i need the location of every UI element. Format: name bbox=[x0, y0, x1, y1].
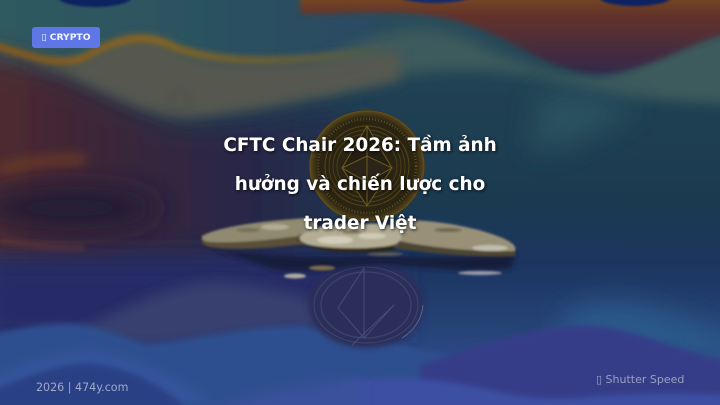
top right dark blue ellipse bbox=[599, 0, 671, 6]
right flat coin bbox=[390, 220, 515, 257]
category badge: ▯ CRYPTO bbox=[41, 32, 91, 43]
wave: lower left light band bbox=[0, 352, 215, 405]
wave: lower left indigo field bbox=[0, 258, 400, 343]
wave: right blue glow bbox=[560, 303, 720, 360]
wave: upper left orange ridge bbox=[0, 38, 380, 61]
faint ring mark bbox=[170, 92, 190, 112]
reflected coin glints bbox=[284, 252, 502, 278]
wave: right teal glow bbox=[530, 94, 640, 150]
centre flat coin bbox=[298, 224, 402, 252]
category badge bbox=[32, 27, 100, 48]
wave: left dark pool bbox=[0, 186, 160, 230]
wave: bottom left dark hump bbox=[0, 363, 200, 405]
upright ethereum coin bbox=[309, 110, 425, 222]
left flat coin bbox=[202, 218, 330, 249]
wave: left maroon to purple field bbox=[0, 50, 350, 262]
wave: bottom middle strip bbox=[180, 380, 360, 405]
wave: left orange streak bbox=[0, 160, 85, 170]
title: trader Việt bbox=[304, 213, 416, 234]
wave: lower left blue band bbox=[0, 324, 720, 405]
wave: upper left beige band bbox=[0, 38, 400, 118]
title: CFTC Chair 2026: Tầm ảnh bbox=[223, 135, 497, 156]
flat coin shadow bbox=[205, 246, 515, 271]
wave: top right grey green band bbox=[320, 29, 720, 104]
wave: top right orange and maroon bbox=[300, 0, 720, 74]
wave: bottom strip bbox=[340, 379, 720, 405]
footer: year and site: 2026 | 474y.com bbox=[36, 381, 128, 394]
photo credit: ▯ Shutter Speed bbox=[596, 373, 684, 386]
wave: lower left orange streak bbox=[0, 240, 85, 248]
top left dark blue ellipse bbox=[57, 0, 133, 7]
top left teal field bbox=[0, 0, 380, 70]
wave: lower right purple hump bbox=[420, 325, 720, 405]
title bbox=[223, 134, 498, 236]
coin reflection bbox=[308, 262, 424, 348]
top middle dark blue ellipse bbox=[397, 0, 473, 3]
wave: faint muted hump bbox=[60, 282, 360, 345]
title: hưởng và chiến lược cho bbox=[235, 174, 485, 195]
